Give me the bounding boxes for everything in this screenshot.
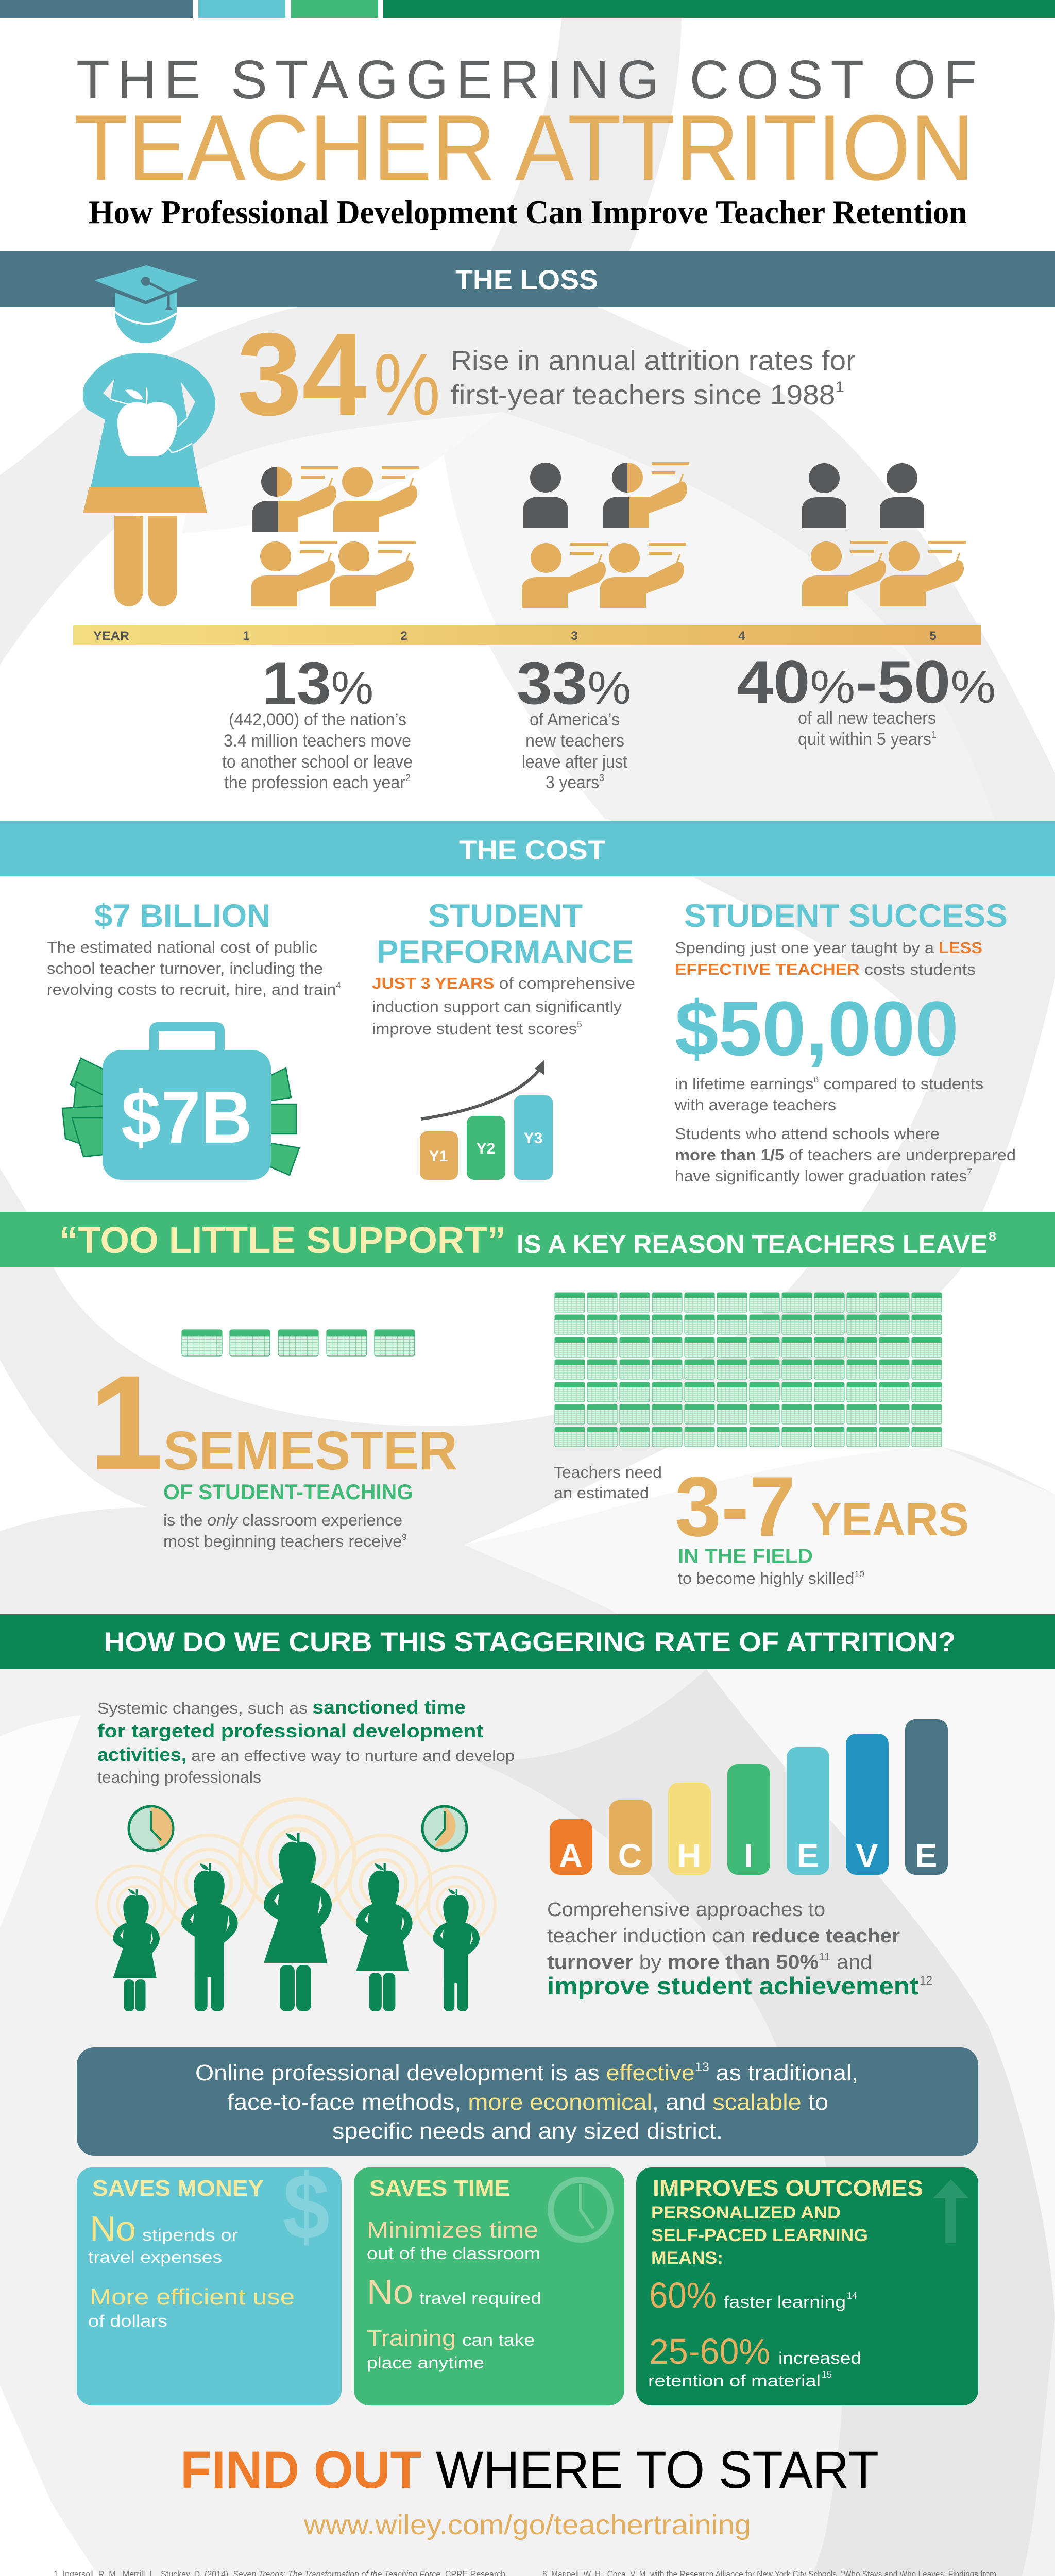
stat: three to seven years: 10 xyxy=(854,1569,864,1579)
panel: improves outcomes: 14 xyxy=(847,2291,857,2301)
text: comprehensive approaches: 12 xyxy=(920,1974,932,1988)
panel: student success: 6 xyxy=(813,1075,819,1084)
chart: achieve bars: H xyxy=(677,1837,701,1874)
panel: improves outcomes: faster learning xyxy=(724,2293,846,2311)
panel: online professional development: 13 xyxy=(695,2060,709,2074)
panel: saves money: No xyxy=(90,2209,136,2248)
stat: 13 percent: 2 xyxy=(405,773,411,784)
year timeline: 2 xyxy=(400,629,407,643)
stat: one semester xyxy=(89,1347,457,1550)
panel: 7 billion: $7 BILLION xyxy=(94,898,270,934)
panel: student success: have significantly lower graduation rates xyxy=(675,1167,959,1185)
icon: arrow watermark xyxy=(933,2179,969,2243)
icon: seven years of calendars xyxy=(555,1293,942,1447)
chart: achieve bars: E xyxy=(797,1837,819,1874)
stat: 13 percent: 13% xyxy=(262,649,373,717)
chart: achieve bars: E xyxy=(915,1837,937,1874)
panel: student success: $50,000 xyxy=(675,985,959,1072)
panel: student performance: STUDENT xyxy=(428,898,583,934)
stat: 33 percent: leave after just xyxy=(522,752,628,772)
stat: 13 percent: (442,000) of the nation’s xyxy=(229,710,406,730)
panel: 7 billion: 4 xyxy=(336,980,341,990)
panel: improves outcomes: 60% xyxy=(649,2275,717,2315)
stat: one semester: most beginning teachers receive xyxy=(163,1532,393,1550)
panel: student success: Students who attend schools where xyxy=(675,1125,940,1143)
panel: saves money xyxy=(77,2155,342,2405)
icon: rings of influence xyxy=(97,1799,495,1944)
panel: student success: EFFECTIVE TEACHER costs students xyxy=(675,960,976,978)
stat: 34 percent rise: first-year teachers since 1988 xyxy=(451,380,815,411)
icon: clock watermark xyxy=(551,2180,610,2240)
call to action heading: FIND OUT xyxy=(180,2441,421,2499)
panel: 7 billion: The estimated national cost of public xyxy=(47,938,317,956)
chart: rising bars: Y2 xyxy=(477,1140,495,1157)
stat: three to seven years: an estimated xyxy=(554,1484,649,1502)
stat: 40 to 50 percent: of all new teachers xyxy=(798,708,936,728)
panel: online professional development: specific needs and any sized district. xyxy=(332,2119,723,2144)
year timeline: 3 xyxy=(571,629,578,643)
chart: achieve bars: V xyxy=(856,1837,878,1874)
text: comprehensive approaches: teacher induction can reduce teacher xyxy=(547,1925,900,1947)
panel: saves time: travel required xyxy=(419,2289,541,2308)
panel: improves outcomes: increased xyxy=(778,2349,861,2367)
icon: teachers with apples xyxy=(113,1833,480,2011)
band: too little support xyxy=(0,1212,1055,1267)
panel: 7 billion: school teacher turnover, including the xyxy=(47,959,323,977)
year timeline: 4 xyxy=(738,629,745,643)
text: comprehensive approaches: improve student achievement xyxy=(547,1972,918,1999)
panel: saves time: Minimizes time xyxy=(367,2217,538,2243)
band: how do we curb xyxy=(0,1614,1055,1669)
panel: online professional development xyxy=(77,2047,978,2156)
stat: 13 percent: to another school or leave xyxy=(222,752,413,772)
panel: student performance: induction support can significantly xyxy=(372,997,622,1015)
panel: improves outcomes xyxy=(636,2167,978,2405)
panel: student success: 7 xyxy=(967,1167,972,1177)
band: too little support: IS A KEY REASON TEACHERS LEAVE xyxy=(517,1231,988,1259)
chart: achieve bars xyxy=(550,1719,948,1875)
panel: student performance: PERFORMANCE xyxy=(377,934,634,970)
panel: improves outcomes: MEANS: xyxy=(651,2248,723,2268)
stat: three to seven years: YEARS xyxy=(811,1494,969,1546)
stat: 34 percent rise: 1 xyxy=(835,379,844,396)
title: TEACHER ATTRITION xyxy=(74,96,974,200)
icon: year one teachers xyxy=(251,467,419,606)
text: comprehensive approaches: and xyxy=(831,1952,872,1973)
panel: improves outcomes: IMPROVES OUTCOMES xyxy=(653,2176,923,2201)
stat: 34 percent rise xyxy=(237,309,856,440)
icon: five weeks of calendars xyxy=(182,1330,415,1356)
band: the cost xyxy=(0,821,1055,876)
text: systemic changes: Systemic changes, such as sanctioned time xyxy=(97,1697,466,1718)
icon: year three teachers xyxy=(522,463,689,608)
text: systemic changes: activities, are an effective way to nurture and develop xyxy=(97,1744,515,1765)
panel: online professional development: as traditional, xyxy=(709,2060,858,2086)
icon: clock left xyxy=(129,1806,173,1851)
stat: 33 percent xyxy=(517,649,631,792)
text: systemic changes xyxy=(97,1697,515,1786)
panel: improves outcomes: PERSONALIZED AND xyxy=(651,2203,841,2223)
call to action heading xyxy=(180,2441,879,2499)
panel: improves outcomes: 15 xyxy=(822,2369,832,2380)
panel: student success: more than 1/5 of teachers are underprepared xyxy=(675,1146,1016,1164)
panel: saves money: More efficient use xyxy=(90,2284,295,2310)
chart: achieve bars: C xyxy=(618,1837,642,1874)
panel: saves money: of dollars xyxy=(88,2312,167,2330)
panel: student success: STUDENT SUCCESS xyxy=(684,898,1008,934)
stat: 40 to 50 percent: quit within 5 years xyxy=(798,730,938,749)
chart: rising bars: Y1 xyxy=(429,1148,448,1165)
panel: student success xyxy=(674,898,1016,1185)
stat: one semester: SEMESTER xyxy=(163,1420,457,1481)
icon: money bag: $7B xyxy=(121,1076,252,1159)
call to action heading: WHERE TO START xyxy=(436,2441,879,2499)
stat: 33 percent: new teachers xyxy=(525,731,624,751)
panel: saves money: SAVES MONEY xyxy=(92,2176,264,2201)
panel: student performance: JUST 3 YEARS of comprehensive xyxy=(372,974,635,992)
stat: 34 percent rise: % xyxy=(373,336,440,434)
icon: money bag xyxy=(62,1027,299,1180)
stat: one semester: 9 xyxy=(402,1532,407,1542)
url: www.wiley.com/go/teachertraining xyxy=(303,2510,751,2540)
text: comprehensive approaches: turnover by more than 50% xyxy=(547,1952,807,1973)
chart: achieve bars: I xyxy=(744,1837,753,1874)
year timeline: 1 xyxy=(243,629,250,643)
top colour bars xyxy=(0,0,1055,18)
stat: 33 percent: 3 xyxy=(599,773,604,784)
panel: saves time: can take xyxy=(462,2331,535,2349)
panel: student performance: 5 xyxy=(577,1020,582,1029)
stat: 13 percent: 3.4 million teachers move xyxy=(224,731,411,751)
icon: clock right xyxy=(422,1806,467,1851)
text: systemic changes: for targeted professional development xyxy=(97,1720,483,1741)
chart: rising bars xyxy=(420,1060,553,1180)
stat: 33 percent: 33% xyxy=(517,649,631,717)
stat: 13 percent: the profession each year xyxy=(224,773,416,792)
stat: three to seven years: IN THE FIELD xyxy=(678,1546,813,1567)
panel: saves time: out of the classroom xyxy=(367,2244,540,2263)
panel: saves time: Training xyxy=(367,2326,456,2351)
panel: improves outcomes: retention of material xyxy=(648,2371,821,2390)
icon: dollar watermark: $ xyxy=(283,2155,330,2259)
title xyxy=(74,49,977,230)
panel: 7 billion: revolving costs to recruit, hire, and train xyxy=(47,980,326,998)
stat: 33 percent: of America’s xyxy=(530,710,620,730)
icon: year five teachers xyxy=(802,463,966,606)
panel: online professional development: face-to-face methods, more economical , and scalable to xyxy=(227,2090,828,2115)
stat: three to seven years: 3-7 xyxy=(675,1459,795,1554)
panel: student performance: improve student test scores xyxy=(372,1020,567,1038)
panel: improves outcomes: SELF-PACED LEARNING xyxy=(651,2226,868,2245)
year timeline xyxy=(73,625,981,645)
stat: 40 to 50 percent xyxy=(737,648,996,749)
stat: 40 to 50 percent: 1 xyxy=(931,730,937,740)
stat: one semester: OF STUDENT-TEACHING xyxy=(163,1480,413,1504)
stat: three to seven years: Teachers need xyxy=(554,1463,662,1481)
text: comprehensive approaches: Comprehensive approaches to xyxy=(547,1899,825,1921)
panel: student success: with average teachers xyxy=(674,1096,836,1114)
text: systemic changes: teaching professionals xyxy=(97,1768,261,1786)
panel: saves time: SAVES TIME xyxy=(369,2176,510,2201)
chart: rising bars: Y3 xyxy=(524,1130,542,1147)
title: How Professional Development Can Improve Teacher Retention xyxy=(89,194,967,230)
panel: student success: Spending just one year taught by a LESS xyxy=(675,939,982,957)
panel: saves money: stipends or xyxy=(142,2226,238,2244)
stat: one semester: is the only classroom experience xyxy=(163,1511,402,1529)
stat: one semester: 1 xyxy=(89,1347,164,1498)
panel: 7 billion xyxy=(47,898,341,998)
panel: improves outcomes: 25-60% xyxy=(649,2331,770,2371)
band: how do we curb: HOW DO WE CURB THIS STAGGERING RATE OF ATTRITION? xyxy=(104,1627,956,1657)
band: the loss xyxy=(0,251,1055,307)
panel: saves time: No xyxy=(367,2273,413,2312)
stat: 13 percent xyxy=(222,649,413,792)
band: too little support: 8 xyxy=(989,1230,996,1244)
panel: saves money: travel expenses xyxy=(88,2248,222,2266)
stat: three to seven years xyxy=(554,1459,969,1587)
year timeline: 5 xyxy=(929,629,937,643)
title: THE STAGGERING COST OF xyxy=(76,49,977,110)
chart: achieve bars: A xyxy=(559,1837,583,1874)
band: the cost: THE COST xyxy=(459,835,605,866)
year timeline: YEAR xyxy=(93,629,129,643)
panel: online professional development: Online professional development is as effective xyxy=(195,2060,690,2086)
text: comprehensive approaches xyxy=(547,1899,932,1999)
panel: saves time: place anytime xyxy=(367,2353,484,2372)
band: too little support: “TOO LITTLE SUPPORT” xyxy=(59,1220,506,1261)
stat: 34 percent rise: Rise in annual attrition rates for xyxy=(451,345,856,376)
panel: student success: in lifetime earnings xyxy=(675,1075,808,1093)
icon: teacher with apple xyxy=(83,265,215,606)
panel: student success: compared to students xyxy=(819,1075,983,1093)
text: comprehensive approaches: 11 xyxy=(819,1951,831,1963)
stat: 33 percent: 3 years xyxy=(546,773,603,792)
panel: student performance xyxy=(372,898,635,1038)
stat: 40 to 50 percent: 40%-50% xyxy=(737,648,996,716)
band: the loss: THE LOSS xyxy=(455,265,598,295)
panel: saves time xyxy=(354,2167,624,2405)
stat: three to seven years: to become highly skilled xyxy=(678,1569,847,1587)
stat: 34 percent rise: 34 xyxy=(237,309,367,440)
